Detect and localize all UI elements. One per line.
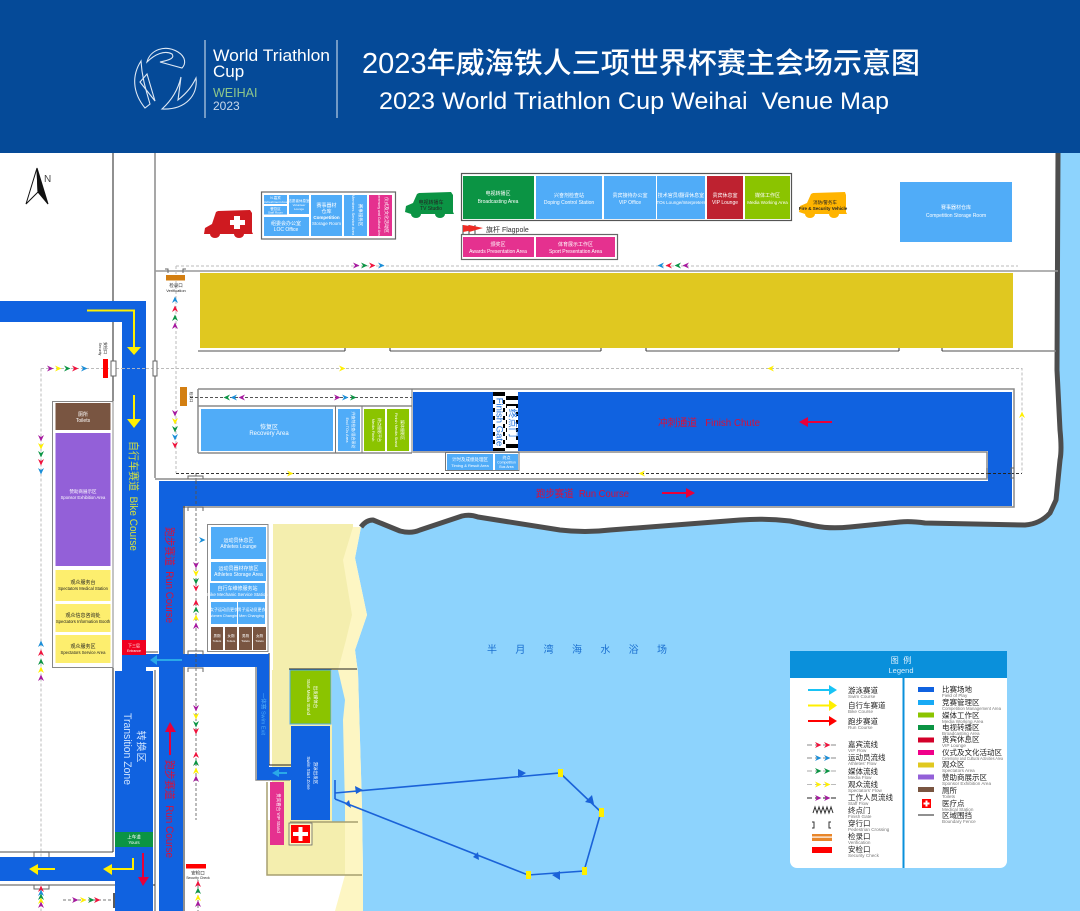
- panel: organising offices: 志愿者休息室: [288, 198, 310, 203]
- legend left column text: [848, 685, 893, 858]
- security check left: Security: [98, 343, 102, 356]
- panel: spectator column: Toilets: [76, 418, 91, 424]
- road labels: 跑步赛道 Run Course: [536, 487, 629, 500]
- transition zone: [115, 671, 153, 911]
- panel: presentation areas: Sport Presentation Area: [549, 249, 602, 255]
- panel: spectator column: Spectators Medical Station: [58, 586, 109, 591]
- panel: organising offices: 赛事器材: [316, 202, 337, 209]
- panel: organising offices: Members Service Area: [351, 195, 356, 236]
- panel: spectator column: 观众服务台: [70, 579, 96, 586]
- panel: recovery area row: 终点摄影平台: [377, 418, 383, 442]
- panel: organising offices: Ceremony and Cultural Area: [377, 193, 381, 237]
- panel: spectator column: 观众信息咨询处: [65, 612, 101, 619]
- legend left column text: Bike Course: [848, 709, 873, 714]
- legend right column text: 仪式及文化活动区: [942, 747, 1002, 757]
- legend right column text: 赞助商展示区: [942, 772, 987, 782]
- legend left column text: Athletes' Flow: [848, 761, 877, 766]
- panel: broadcasting and lounges: 贵宾休息室: [712, 192, 738, 199]
- legend right column text: Ceremony and Cultural Activities Area: [942, 756, 1003, 761]
- panel: athlete column: Bike Mechanic Service Station: [207, 592, 268, 597]
- legend right column text: Media Working Area: [942, 719, 984, 724]
- panel: spectator column: 厕所: [78, 411, 88, 418]
- panel: broadcasting and lounges: 技术官员/翻译休息室: [658, 192, 704, 199]
- legend left column text: Media Flow: [848, 775, 872, 780]
- course roads: [0, 301, 1012, 911]
- TV studio truck: TV Studio: [420, 206, 442, 212]
- panel: spectator column: 赞助商展示区: [70, 488, 97, 495]
- bike course bottom: [0, 857, 115, 881]
- verification gate top: 检录口: [169, 282, 183, 289]
- panel: spectator column: 观众服务区: [70, 643, 96, 650]
- panel: organising offices: 仓库: [321, 208, 332, 215]
- legend left column text: 自行车赛道: [848, 700, 886, 710]
- logo wordmark: Cup: [213, 62, 244, 81]
- legend right column text: Broadcasting Area: [942, 731, 980, 736]
- panel: recovery area row: 兴奋剂检查/混合采访: [351, 411, 357, 449]
- panel: spectator column: Spectators Service Area: [61, 650, 106, 655]
- legend right column text: Boundary Fence: [942, 819, 976, 824]
- legend right column text: Field of Play: [942, 693, 968, 698]
- road labels: Transition Zone: [121, 713, 133, 785]
- ambulance: [204, 210, 253, 238]
- panel: athlete column: 女子运动员更衣: [210, 606, 238, 612]
- panel: recovery area row: Finish Media Stand: [394, 413, 399, 447]
- dashed flow lines: [41, 266, 1022, 911]
- panel: athlete column: 男厕: [214, 633, 221, 638]
- legend left column text: Finish Gate: [848, 814, 872, 819]
- course direction arrows: [29, 310, 832, 886]
- panel: broadcasting and lounges: TOs Lounge/Interpreters: [657, 200, 706, 205]
- legend left column text: Spectators' Flow: [848, 788, 882, 793]
- legend left column text: 嘉宾流线: [848, 739, 878, 749]
- panel: athlete column: Women Changing: [209, 614, 239, 618]
- legend right column text: 电视转播区: [942, 722, 980, 732]
- panel: broadcasting and lounges: Doping Control Station: [544, 200, 594, 206]
- sea label: 半月湾海水浴场: [487, 643, 667, 656]
- legend left column text: Run Course: [848, 725, 873, 730]
- elevated platform red box: 下三层: [128, 642, 140, 648]
- road labels: 转换区: [134, 730, 147, 764]
- legend left column text: Pedestrian Crossing: [848, 827, 890, 832]
- medical station: [289, 823, 312, 845]
- legend left column text: 游泳赛道: [848, 685, 878, 695]
- panel: organising offices: Storage Room: [312, 221, 341, 226]
- legend right column text: Sponsor Exhibition Area: [942, 781, 991, 786]
- legend right column text: Competition Management Area: [942, 706, 1001, 711]
- panel: broadcasting and lounges: Media Working Area: [747, 200, 788, 205]
- swim media stand: 出发媒体台: [312, 686, 319, 709]
- road labels: 一体赛 Swim Exit: [260, 693, 268, 736]
- legend left column text: Verification: [848, 840, 871, 845]
- security check bottom: [186, 864, 210, 880]
- panel: broadcasting and lounges: 媒体工作区: [755, 192, 780, 199]
- panel: athlete column: 男子运动员更衣: [238, 606, 266, 612]
- dashed crossings over the roads: [122, 368, 1012, 667]
- panel: timing and results: Timing & Result Area: [451, 463, 489, 468]
- panel: recovery area row: [201, 389, 412, 453]
- VIP stand: [270, 782, 284, 845]
- panel: athlete column: Athletes Storage Area: [214, 572, 263, 578]
- legend left column text: 运动员流线: [848, 752, 886, 762]
- logo wordmark: 2023: [213, 99, 240, 113]
- logo wordmark: [213, 46, 330, 113]
- legend right column text: 观众区: [942, 760, 965, 769]
- panel: legend: 图 例: [891, 655, 911, 665]
- swim media stand: [290, 670, 331, 724]
- panel: organising offices: 组委会办公室: [271, 220, 301, 227]
- panel: presentation areas: [462, 234, 618, 260]
- swim start zone: 游泳出发区: [312, 762, 319, 785]
- legend right column text: 竞赛管理区: [942, 697, 980, 707]
- panel: athlete column: Toilets: [213, 639, 222, 643]
- bike course: [0, 301, 146, 655]
- panel: timing and results: 终点: [502, 454, 510, 460]
- panel: timing and results: Bus Area: [499, 465, 514, 469]
- finish gate: 终点门: [506, 409, 518, 437]
- coastline seawall: [361, 153, 1061, 532]
- swim course: [335, 769, 604, 880]
- legend left column text: 媒体流线: [848, 766, 878, 776]
- security check left: 安检口: [103, 342, 109, 354]
- panel: organising offices: Refreshment Area: [263, 200, 288, 204]
- title English: 2023 World Triathlon Cup Weihai Venue Map: [379, 88, 889, 115]
- legend left column text: 穿行口: [848, 818, 870, 828]
- legend right column text: Spectators Area: [942, 768, 975, 773]
- north arrow: [26, 168, 51, 204]
- panel: broadcasting and lounges: [462, 174, 792, 220]
- verification gate top: [166, 275, 186, 293]
- panel: legend: [790, 651, 1007, 868]
- swim media stand: Start Media Stand: [306, 679, 311, 716]
- verification gate middle: [180, 387, 194, 406]
- panel: organising offices: Lounge: [294, 207, 304, 211]
- swim start zone: Swim Start Zone: [306, 756, 311, 790]
- road labels: 跑步赛道 Run Course: [163, 527, 177, 623]
- panel: organising offices: 餐饮区: [270, 206, 281, 211]
- sea: [355, 153, 1080, 911]
- panel: spectator column: Sponsor Exhibition Area: [61, 495, 106, 500]
- panel: presentation areas: Awards Presentation Area: [469, 249, 527, 255]
- fire and security vehicle: [799, 192, 848, 218]
- panel: athlete column: 女厕: [256, 633, 264, 638]
- panel: spectator column: Spectators Information Booth: [56, 619, 111, 624]
- security check left: [98, 342, 109, 378]
- flagpole: 旗杆 Flagpole: [486, 225, 529, 234]
- panel: organising offices: Competition: [313, 215, 340, 220]
- legend right column swatches: [918, 687, 934, 815]
- TV studio truck: 电视转播车: [418, 199, 444, 206]
- panel: spectator column: [52, 402, 113, 668]
- legend right column text: VIP Lounge: [942, 743, 966, 748]
- legend left column text: Security Check: [848, 853, 880, 858]
- panel: recovery area row: Recovery Area: [249, 431, 289, 437]
- finish gate: [493, 392, 518, 451]
- elevated platform red box: Entrance: [127, 649, 141, 653]
- road labels: 跑步赛道 Run Course: [163, 760, 177, 858]
- legend left column symbols: [807, 685, 838, 853]
- legend left column text: 检录口: [848, 831, 870, 841]
- TV studio truck: [405, 192, 454, 218]
- legend left column text: VIP Flow: [848, 748, 867, 753]
- road labels: 自行车赛道 Bike Course: [127, 441, 141, 551]
- VIP stand: 贵宾看台 VIP Stand: [275, 793, 282, 833]
- panel: athlete column: 运动员器材存放区: [218, 565, 259, 572]
- legend left column text: 工作人员流线: [848, 792, 893, 802]
- elevated platform red box: [122, 640, 146, 655]
- panel: timing and results: 计时及成绩处理区: [452, 456, 488, 463]
- legend right column text: 比赛场地: [942, 684, 972, 694]
- panel: recovery area row: Media Finish: [371, 419, 376, 441]
- logo wordmark: World Triathlon: [213, 46, 330, 65]
- north arrow: N: [44, 174, 51, 185]
- panel: athlete column: Men Changing: [239, 614, 264, 618]
- verification gate middle: 检录口: [189, 392, 194, 403]
- legend right column text: 贵宾休息区: [942, 734, 980, 744]
- panel: broadcasting and lounges: 电视转播区: [485, 190, 511, 197]
- yours green box: [115, 832, 153, 847]
- fire and security vehicle: Fire & Security Vehicle: [799, 206, 848, 211]
- title Chinese: 2023年威海铁人三项世界杯赛主会场示意图: [362, 47, 920, 80]
- panel: broadcasting and lounges: VIP Office: [619, 200, 641, 206]
- legend left column text: 安检口: [848, 844, 870, 854]
- panel: organising offices: 仪式及文化活动区: [383, 197, 390, 233]
- panel: athlete column: 自行车维修服务站: [217, 585, 258, 592]
- panel: broadcasting and lounges: Broadcasting Area: [478, 199, 519, 205]
- legend left column text: Staff Flow: [848, 801, 869, 806]
- panel: broadcasting and lounges: 兴奋剂检查站: [554, 192, 584, 199]
- flagpole: [463, 225, 529, 235]
- road labels: 冲刺通道 Finish Chute: [658, 416, 760, 429]
- panel: recovery area row: 恢复区: [260, 423, 278, 431]
- competition storage room: [900, 182, 1012, 242]
- competition storage room: 赛事器材仓库: [941, 204, 971, 211]
- legend right column text: [942, 684, 1003, 824]
- legend left column text: 跑步赛道: [848, 716, 878, 726]
- pedestrian crossing brackets: [34, 269, 1014, 889]
- panel: timing and results: [446, 452, 519, 470]
- panel: athlete column: 男厕: [242, 633, 249, 638]
- panel: athlete column: 运动员休息区: [223, 537, 254, 544]
- panel: recovery area row: 媒体摄影区: [400, 420, 406, 440]
- panel: organising offices: [262, 192, 396, 239]
- panel: broadcasting and lounges: VIP Lounge: [712, 200, 738, 206]
- security check bottom: 安检口: [191, 870, 205, 876]
- panel: presentation areas: 体育展示工作区: [558, 241, 593, 248]
- verification gate top: Verification: [166, 288, 186, 293]
- beach: [267, 524, 367, 911]
- security check bottom: Security Check: [186, 876, 210, 880]
- grandstand spectator area: [200, 273, 1013, 348]
- flow chevrons: [38, 262, 1025, 908]
- logo dividers: [205, 40, 337, 118]
- legend right column text: Toilets: [942, 794, 956, 799]
- panel: organising offices: N.嘉宾: [270, 195, 281, 200]
- panel: organising offices: Staff Room: [268, 210, 283, 214]
- panel: organising offices: Volunteer: [293, 203, 305, 207]
- buoys: [526, 769, 604, 879]
- legend left column text: Swim Course: [848, 694, 876, 699]
- header banner: [0, 0, 1080, 153]
- yours green box: Yours: [128, 840, 140, 845]
- panel: timing and results: Competition: [497, 460, 516, 464]
- panel: legend: Legend: [888, 666, 914, 675]
- competition storage room: Competition Storage Room: [926, 213, 986, 219]
- finish gate: Finish Gate: [493, 398, 504, 446]
- run link to swim: [146, 654, 291, 780]
- panel: organising offices: LOC Office: [274, 227, 299, 233]
- panel: broadcasting and lounges: 贵宾接待办公室: [612, 192, 648, 199]
- panel: presentation areas: 颁奖区: [490, 241, 506, 248]
- swim start zone: [291, 726, 330, 820]
- legend right column text: 医疗点: [942, 798, 965, 808]
- road labels: [121, 416, 760, 858]
- legend left column text: 终点门: [848, 805, 870, 815]
- panel: athlete column: Toilets: [255, 639, 264, 643]
- logo mark: [135, 48, 196, 109]
- logo wordmark: WEIHAI: [213, 86, 257, 100]
- fire and security vehicle: 消防/警务车: [813, 199, 837, 206]
- panel: athlete column: [207, 524, 268, 652]
- legend right column text: Medical Station: [942, 807, 974, 812]
- run course: [159, 392, 1012, 911]
- panel: athlete column: Toilets: [227, 639, 236, 643]
- panel: athlete column: Toilets: [241, 639, 250, 643]
- yours green box: 上车道: [127, 834, 141, 840]
- panel: recovery area row: End TOs Area: [345, 418, 350, 443]
- legend right column text: 媒体工作区: [942, 710, 980, 720]
- panel: athlete column: Athletes Lounge: [220, 544, 257, 550]
- panel: organising offices: 赛事服务区: [357, 204, 364, 227]
- legend left column text: 观众流线: [848, 779, 878, 789]
- panel: athlete column: 女厕: [228, 633, 235, 638]
- legend right column text: 厕所: [942, 785, 957, 795]
- legend right column text: 区域围挡: [942, 810, 972, 820]
